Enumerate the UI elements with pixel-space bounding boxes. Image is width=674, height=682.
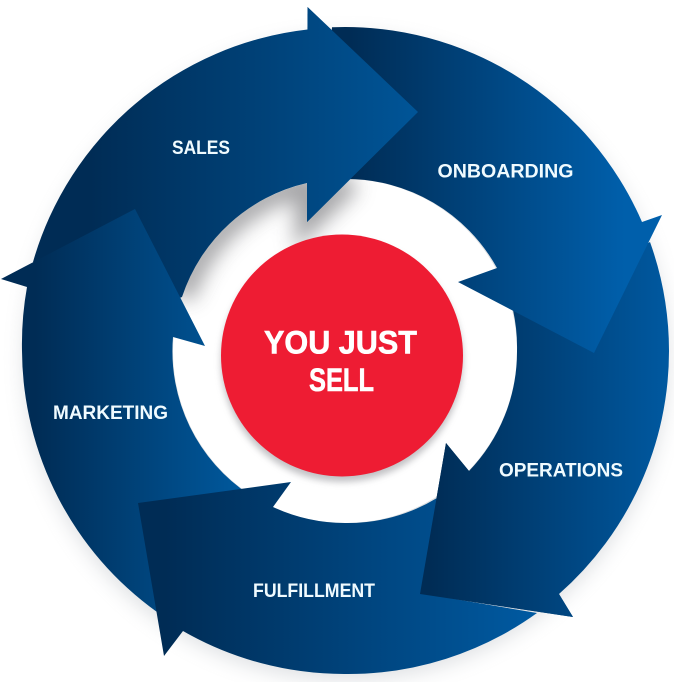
arrow: sales head overlap xyxy=(307,7,418,222)
label: sales: SALES xyxy=(172,137,230,159)
label: fulfillment: FULFILLMENT xyxy=(253,580,375,602)
label: marketing: MARKETING xyxy=(53,402,168,424)
centre text: SELL xyxy=(309,362,374,398)
arrow: operations head overlap xyxy=(420,443,573,617)
arrow: operations xyxy=(420,242,669,617)
arrow: sales xyxy=(33,7,418,330)
arrow: marketing xyxy=(1,209,250,612)
panel: white centre hole xyxy=(173,179,517,523)
centre text xyxy=(264,324,417,398)
centre red circle xyxy=(221,234,463,482)
label: operations: OPERATIONS xyxy=(499,460,623,482)
arrow: fulfillment xyxy=(138,482,537,674)
centre text: YOU JUST xyxy=(264,324,417,360)
label: onboarding: ONBOARDING xyxy=(438,160,574,182)
arrow: onboarding xyxy=(320,27,662,353)
